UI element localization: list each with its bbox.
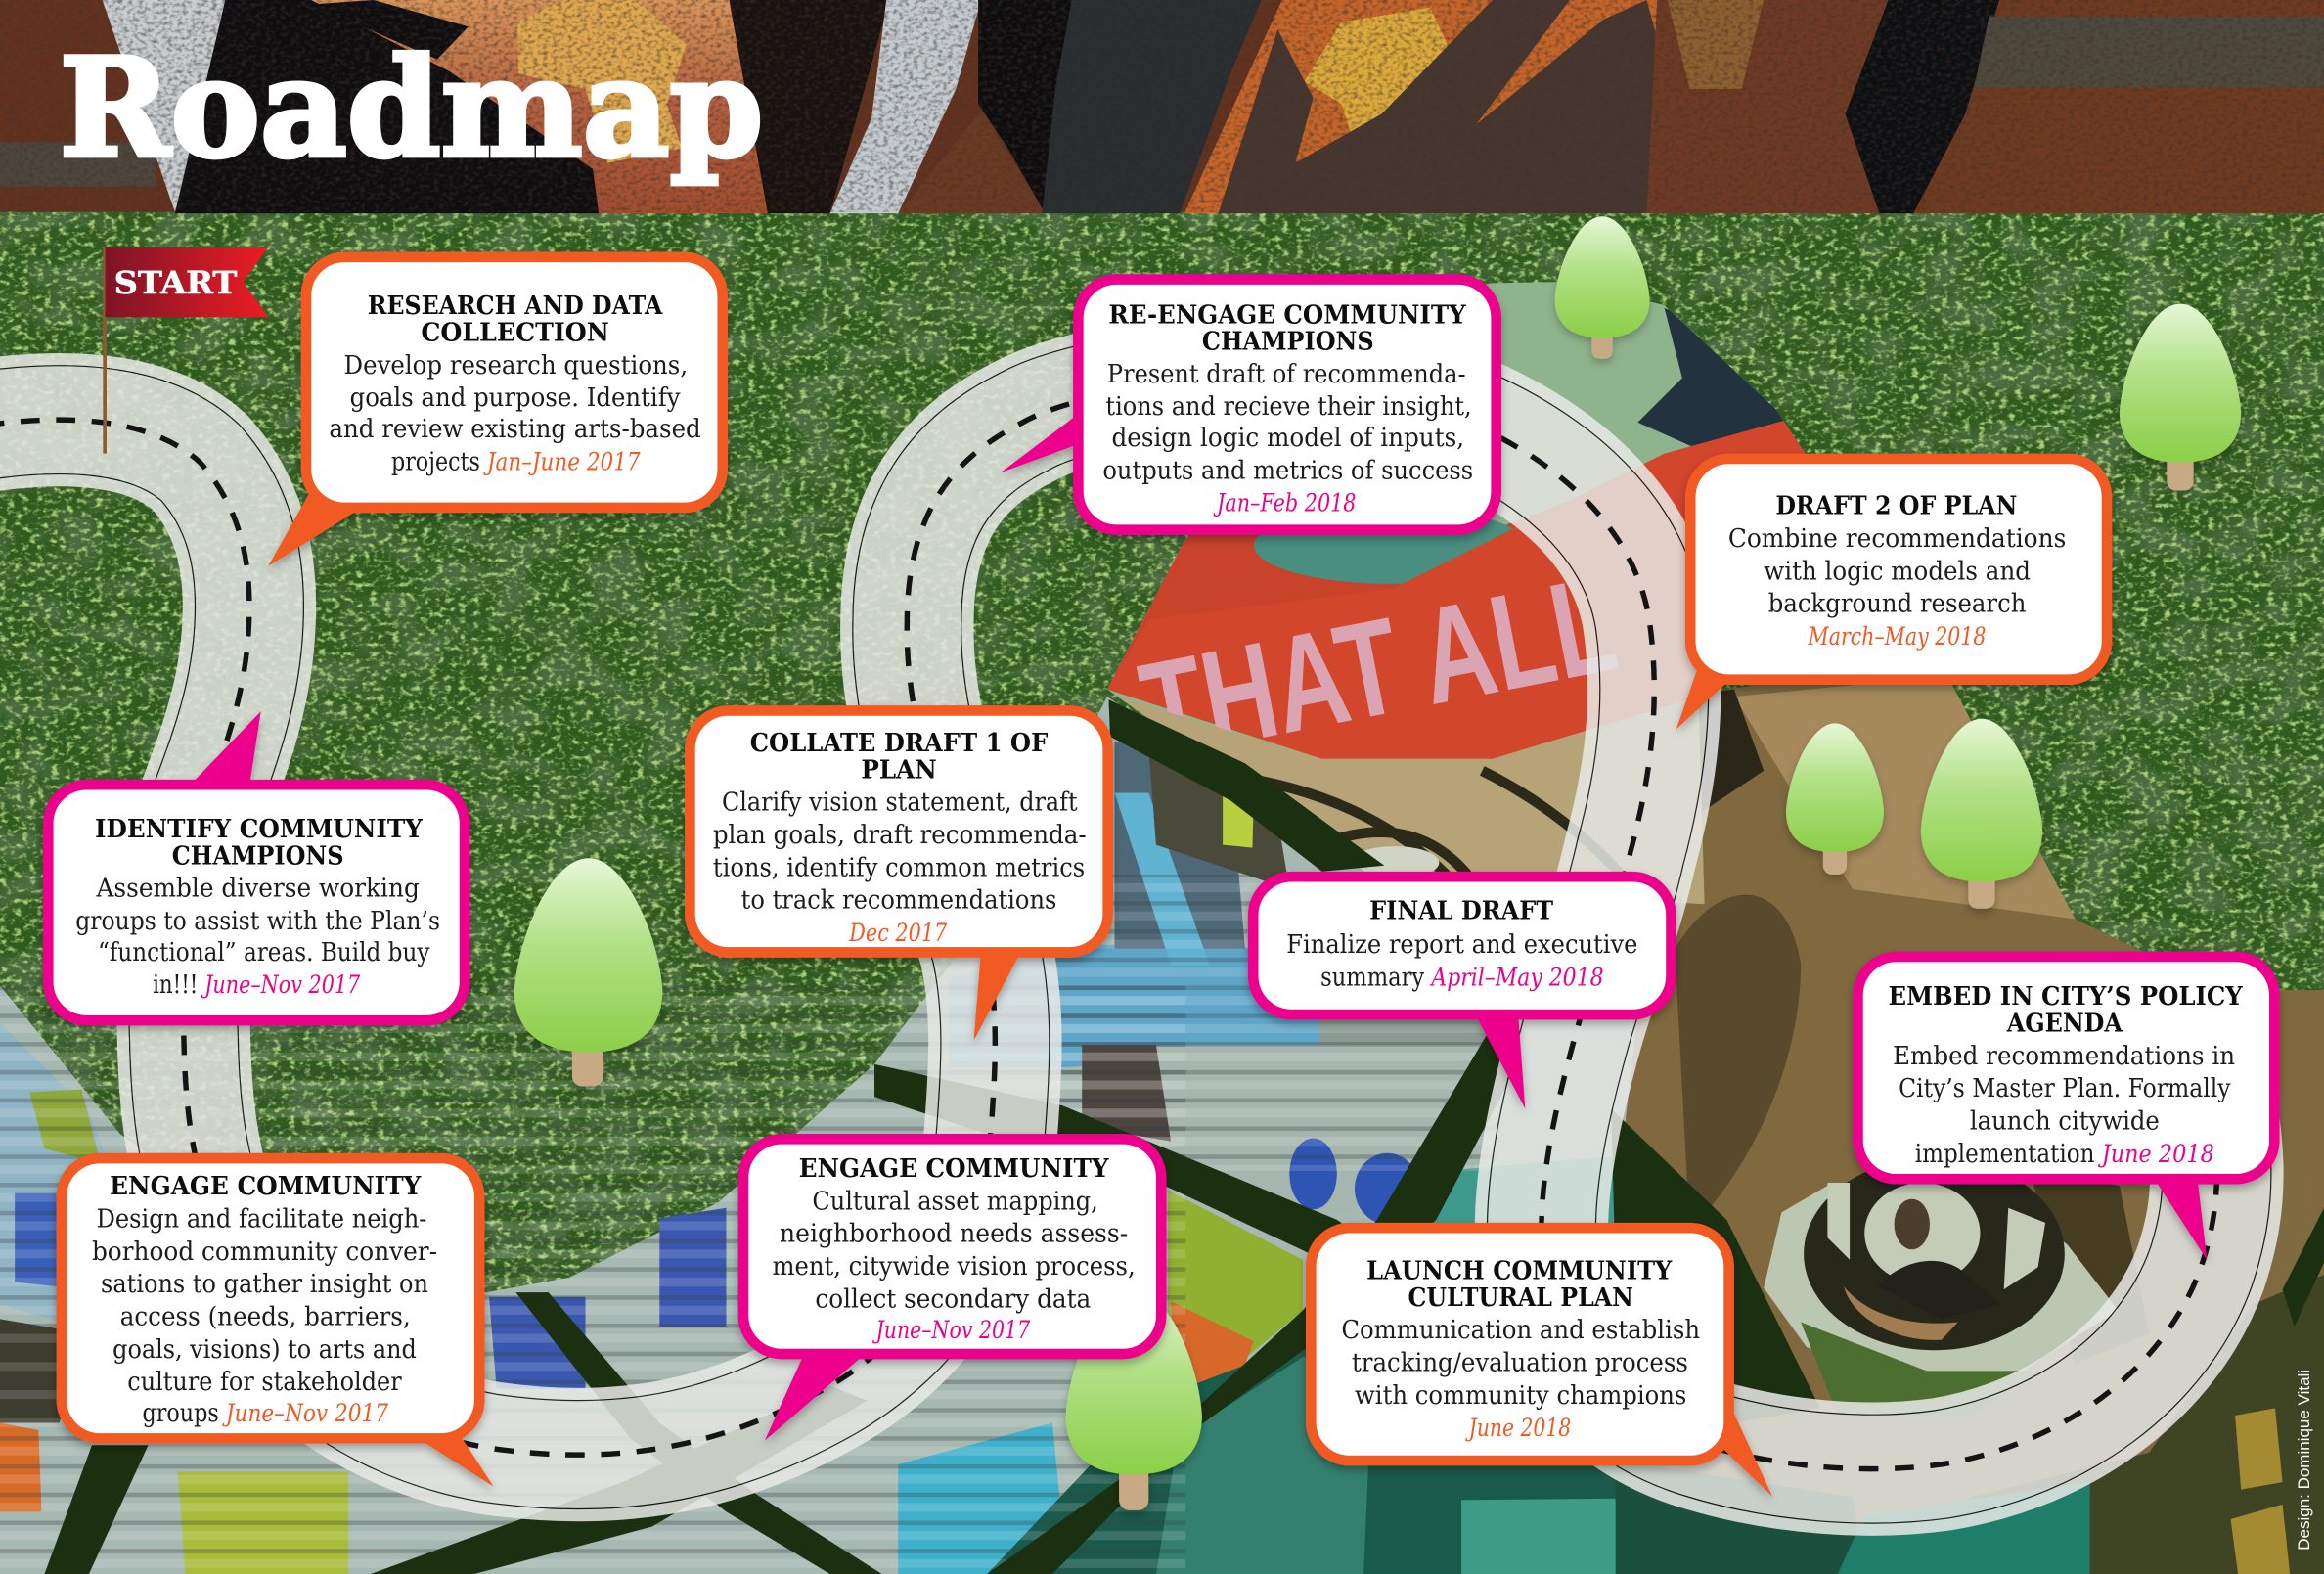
callout pointer [974, 949, 1023, 1041]
body text: ment, citywide vision process, [772, 1252, 1136, 1282]
body text: background research [1768, 590, 2026, 619]
heading: CULTURAL PLAN [1408, 1282, 1633, 1313]
tree 2 [2120, 304, 2241, 490]
tree 1 [1555, 216, 1650, 359]
body text: with community champions [1355, 1381, 1686, 1411]
callout box [1078, 280, 1497, 530]
body text: Embed recommendations in [1893, 1042, 2235, 1071]
heading: RE-ENGAGE COMMUNITY [1108, 299, 1467, 330]
portrait suit [1878, 1261, 2001, 1319]
panel: engage community, pink [743, 1139, 1161, 1441]
tree 3 [1786, 723, 1884, 875]
heading [95, 814, 424, 871]
callout box [1253, 877, 1672, 1014]
heading [1888, 981, 2244, 1038]
header photo band [0, 0, 2324, 213]
body text: Design and facilitate neigh- [96, 1204, 426, 1234]
heading: FINAL DRAFT [1369, 895, 1553, 925]
body text: Present draft of recommenda- [1107, 360, 1466, 389]
tan mural panel with eye [1616, 676, 2324, 1574]
heading: DRAFT 2 OF PLAN [1775, 491, 2017, 521]
body text: summary April–May 2018 [1320, 964, 1604, 993]
body text: Cultural asset mapping, [812, 1187, 1098, 1216]
heading: CHAMPIONS [1202, 327, 1374, 357]
flag pole [103, 247, 107, 454]
body text: outputs and metrics of success [1102, 456, 1473, 485]
callout pointer [1001, 409, 1085, 472]
callout pointer [1472, 1008, 1525, 1108]
callout box [48, 785, 465, 1020]
heading: RESEARCH AND DATA [368, 291, 663, 321]
body text: March–May 2018 [1808, 622, 1987, 651]
body text: in!!! June–Nov 2017 [153, 970, 360, 1000]
flag label: START [114, 264, 238, 301]
callout pointer [268, 481, 363, 566]
body text [75, 875, 440, 1000]
body text [1341, 1316, 1700, 1442]
road [0, 380, 2216, 1469]
tree 4 [1921, 719, 2042, 909]
body text: and review existing arts-based [329, 415, 701, 444]
heading [1108, 299, 1467, 357]
callout box [1857, 957, 2274, 1179]
body text: to track recommendations [741, 886, 1056, 916]
body text: borhood community conver- [92, 1237, 437, 1267]
body text [713, 788, 1087, 947]
callout pointer [765, 1346, 874, 1441]
body text: June–Nov 2017 [872, 1316, 1030, 1344]
body text: with logic models and [1764, 557, 2031, 586]
body text: Assemble diverse working [96, 875, 420, 904]
design credit: Design: Dominique Vitali [2295, 1370, 2313, 1551]
tree 6 [1066, 1289, 1202, 1510]
callout pointer [1676, 670, 1734, 729]
body text [92, 1204, 437, 1428]
heading: EMBED IN CITY’S POLICY [1888, 981, 2244, 1012]
body text: groups to assist with the Plan’s [75, 907, 440, 936]
panel: re-engage community champions [1001, 280, 1497, 530]
body text: Combine recommendations [1728, 524, 2066, 554]
heading: PLAN [861, 754, 937, 785]
body text: June 2018 [1465, 1414, 1571, 1442]
shutter graffiti panel [0, 697, 1778, 1574]
street mural panel with banner [1107, 282, 1806, 904]
body text: goals, visions) to arts and [112, 1335, 417, 1365]
body text [1286, 930, 1637, 993]
body text [1893, 1042, 2235, 1169]
panel: research and data collection [268, 257, 723, 566]
body text: tions and recieve their insight, [1105, 392, 1472, 422]
eye with portrait [1764, 1157, 2118, 1416]
callout box [1311, 1228, 1729, 1461]
heading [750, 728, 1048, 785]
body text: Communication and establish [1341, 1316, 1700, 1345]
portrait head [1895, 1199, 1930, 1249]
mural lettering: THAT ALL [1130, 547, 1628, 787]
heading: IDENTIFY COMMUNITY [95, 814, 424, 844]
heading: COLLATE DRAFT 1 OF [750, 728, 1048, 758]
heading [368, 291, 663, 347]
body text [1102, 360, 1473, 517]
body text: goals and purpose. Identify [350, 383, 681, 413]
body text: Jan–Feb 2018 [1213, 489, 1357, 517]
body text: Clarify vision statement, draft [722, 788, 1078, 818]
body text: groups June–Nov 2017 [142, 1399, 388, 1428]
body text: plan goals, draft recommenda- [713, 821, 1087, 850]
body text: “functional” areas. Build buy [98, 938, 430, 967]
heading: ENGAGE COMMUNITY [799, 1153, 1109, 1184]
callout box [1690, 459, 2107, 680]
panel: draft 2 of plan [1676, 459, 2107, 729]
panel: embed in city's policy agenda [1857, 957, 2274, 1260]
body text [329, 351, 701, 476]
callout pointer [2149, 1171, 2207, 1260]
eye crescent [1844, 1286, 1958, 1340]
heading: CHAMPIONS [172, 840, 344, 871]
callout box [62, 1158, 479, 1438]
panel: identify community champions [48, 711, 465, 1020]
heading: COLLECTION [421, 317, 609, 347]
heading [1366, 1256, 1673, 1313]
road surface [0, 380, 2216, 1469]
body text [1728, 524, 2066, 651]
flag banner [106, 247, 268, 317]
panel: collate draft 1 of plan [690, 710, 1108, 1041]
body text: access (needs, barriers, [120, 1302, 411, 1331]
start flag [103, 247, 268, 454]
body text: culture for stakeholder [127, 1368, 402, 1397]
body text: City’s Master Plan. Formally [1899, 1074, 2231, 1103]
dark grass bands [44, 699, 2324, 1574]
callout pointer [187, 711, 261, 788]
body text [772, 1187, 1136, 1344]
body text: neighborhood needs assess- [780, 1220, 1128, 1249]
callout box [306, 257, 723, 508]
title: Roadmap [60, 27, 763, 188]
body text: implementation June 2018 [1915, 1140, 2214, 1169]
body text: launch citywide [1970, 1106, 2160, 1136]
heading: LAUNCH COMMUNITY [1366, 1256, 1673, 1286]
body text: design logic model of inputs, [1111, 424, 1464, 453]
body text: tracking/evaluation process [1352, 1348, 1688, 1377]
callout box [690, 710, 1108, 952]
body text: tions, identify common metrics [713, 853, 1085, 882]
panel: final draft [1253, 877, 1672, 1108]
panel: launch community cultural plan [1311, 1228, 1772, 1497]
body text: sations to gather insight on [101, 1270, 428, 1299]
body text: Dec 2017 [848, 919, 947, 947]
road centre dashes [0, 380, 2216, 1469]
heading: ENGAGE COMMUNITY [110, 1171, 422, 1201]
heading: AGENDA [2006, 1008, 2123, 1038]
panel: engage community, orange [62, 1158, 494, 1487]
callout pointer [408, 1422, 494, 1487]
body text: Develop research questions, [344, 351, 688, 381]
callout box [743, 1139, 1161, 1354]
body text: collect secondary data [815, 1284, 1091, 1314]
body text: Finalize report and executive [1286, 930, 1637, 960]
tree 5 [514, 858, 662, 1087]
callout pointer [1720, 1401, 1772, 1497]
body text: projects Jan–June 2017 [391, 447, 641, 476]
